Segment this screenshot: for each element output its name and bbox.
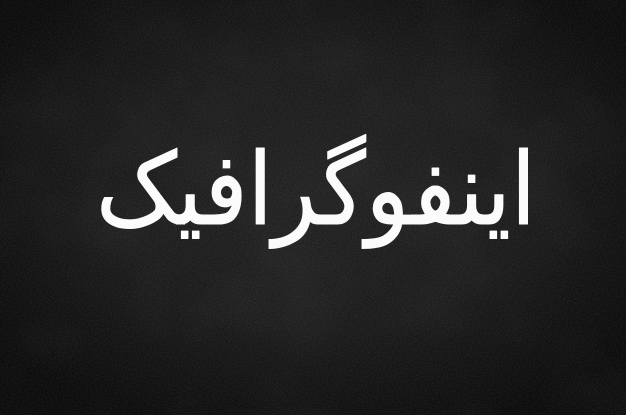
title: اینفوگرافیک — [96, 131, 536, 248]
